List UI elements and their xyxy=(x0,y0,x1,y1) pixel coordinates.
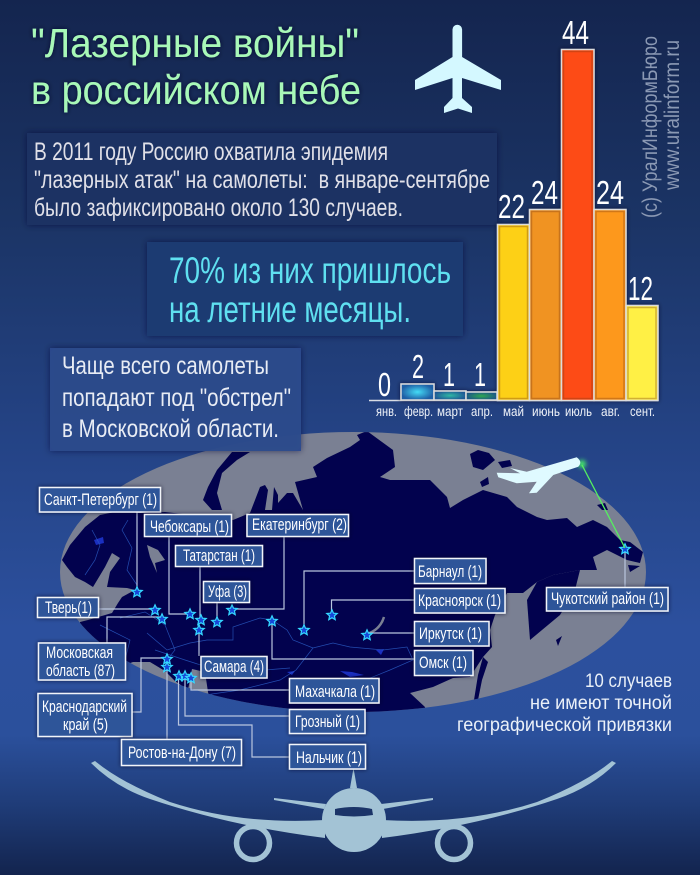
label: Tver xyxy=(38,598,98,618)
bar values xyxy=(378,14,653,403)
bar values: 44 xyxy=(562,14,589,51)
label: Krasnodar xyxy=(38,694,132,736)
lakes xyxy=(94,537,384,677)
label: Cheboksary: Чебоксары (1) xyxy=(150,517,229,536)
label: Makhachkala: Махачкала (1) xyxy=(295,682,375,701)
mainland silhouette xyxy=(62,431,643,730)
White Sea xyxy=(147,545,165,573)
label: Krasnodar: край (5) xyxy=(63,715,108,734)
map of Russia xyxy=(60,431,646,730)
Novaya Zemlya xyxy=(203,452,250,510)
Lake Baikal xyxy=(367,617,384,634)
label: Krasnodar: Краснодарский xyxy=(42,697,127,716)
month labels: сент. xyxy=(630,404,655,419)
label: Moscow region: область (87) xyxy=(46,661,115,680)
label: Barnaul: Барнаул (1) xyxy=(418,562,482,581)
arctic islands xyxy=(470,450,640,700)
label: Rostov-on-Don xyxy=(122,740,242,766)
bar values: 1 xyxy=(474,356,486,393)
label: Saint Petersburg: Санкт-Петербург (1) xyxy=(44,490,157,509)
label: Barnaul xyxy=(414,558,486,584)
text panel: intro: было зафиксировано около 130 случаев. xyxy=(34,194,403,222)
month labels: июль xyxy=(565,404,592,419)
icon: front view airplane xyxy=(91,761,616,860)
month labels: март xyxy=(437,404,463,419)
label: Krasnoyarsk xyxy=(414,588,505,613)
text panel: intro xyxy=(27,133,497,225)
borders xyxy=(85,520,413,700)
label: Nalchik xyxy=(290,744,366,769)
month labels: июнь xyxy=(532,404,560,419)
bar values: 2 xyxy=(412,348,424,385)
note: unlocated cases: 10 случаев xyxy=(585,671,672,692)
bar values: 22 xyxy=(498,188,525,225)
label: Grozny xyxy=(290,710,365,734)
text panel: summer share: 70% из них пришлось xyxy=(169,250,451,291)
label: Tver: Тверь(1) xyxy=(45,598,92,617)
map labels xyxy=(38,488,668,769)
month labels: февр. xyxy=(404,404,433,419)
bar values: 0 xyxy=(378,366,391,403)
label: Omsk xyxy=(414,650,473,676)
label: Ufa xyxy=(204,582,250,602)
label: Yekaterinburg xyxy=(247,514,348,536)
bar values: 24 xyxy=(531,174,558,211)
leader lines xyxy=(99,512,625,757)
label: Tatarstan xyxy=(176,546,262,566)
bar values: 24 xyxy=(596,174,624,211)
laser beam xyxy=(578,460,625,548)
month labels xyxy=(376,404,655,419)
Kamchatka xyxy=(527,570,580,640)
month labels: апр. xyxy=(471,404,493,419)
bar values: 12 xyxy=(628,270,653,307)
icon: airplane top view xyxy=(415,25,501,113)
text panel: Moscow region: в Московской области. xyxy=(62,415,279,443)
label: Yekaterinburg: Екатеринбург (2) xyxy=(252,515,347,534)
label: Samara: Самара (4) xyxy=(204,657,264,676)
title: в российском небе xyxy=(31,67,361,113)
label: Makhachkala xyxy=(290,678,379,703)
text panel: Moscow region: Чаще всего самолеты xyxy=(62,352,269,380)
credit text xyxy=(639,36,684,218)
bar chart: incidents by month xyxy=(369,14,658,419)
credit text: www.uralinform.ru xyxy=(661,40,684,191)
label: Samara xyxy=(201,656,267,678)
text panel: intro: "лазерных атак" на самолеты: в январе-сентябре xyxy=(34,166,490,194)
text panel: Moscow region xyxy=(50,348,301,451)
label: Krasnoyarsk: Красноярск (1) xyxy=(418,591,501,610)
month labels: янв. xyxy=(376,404,397,419)
text panel: summer share xyxy=(147,242,463,336)
label: Cheboksary xyxy=(144,514,232,536)
label: Irkutsk xyxy=(414,622,489,646)
label: Omsk: Омск (1) xyxy=(419,653,467,672)
text panel: Moscow region: попадают под "обстрел" xyxy=(62,384,291,412)
bar values: 1 xyxy=(443,356,455,393)
credit text: (с) УралИнформБюро xyxy=(639,36,662,218)
month labels: авг. xyxy=(601,404,620,419)
note: unlocated cases: географической привязки xyxy=(457,715,672,736)
icon: airplane over the map xyxy=(497,457,580,493)
label: Irkutsk: Иркутск (1) xyxy=(419,624,482,643)
label: Saint Petersburg xyxy=(40,488,160,512)
title: "Лазерные войны" xyxy=(31,20,359,66)
incident markers xyxy=(132,544,630,683)
label: Nalchik: Нальчик (1) xyxy=(296,748,362,767)
label: Moscow region: Московская xyxy=(46,643,113,662)
text panel: intro: В 2011 году Россию охватила эпидемия xyxy=(34,138,388,166)
label: Ufa: Уфа (3) xyxy=(208,582,247,601)
text panel: summer share: на летние месяцы. xyxy=(169,289,411,330)
note: unlocated cases xyxy=(457,671,672,736)
label: Grozny: Грозный (1) xyxy=(295,712,360,731)
title xyxy=(31,20,361,113)
label: Rostov-on-Don: Ростов-на-Дону (7) xyxy=(128,743,236,762)
label: Moscow region xyxy=(38,643,126,680)
label: Tatarstan: Татарстан (1) xyxy=(183,546,255,565)
label: Chukotka xyxy=(546,588,668,611)
note: unlocated cases: не имеют точной xyxy=(530,693,672,714)
month labels: май xyxy=(503,404,524,419)
